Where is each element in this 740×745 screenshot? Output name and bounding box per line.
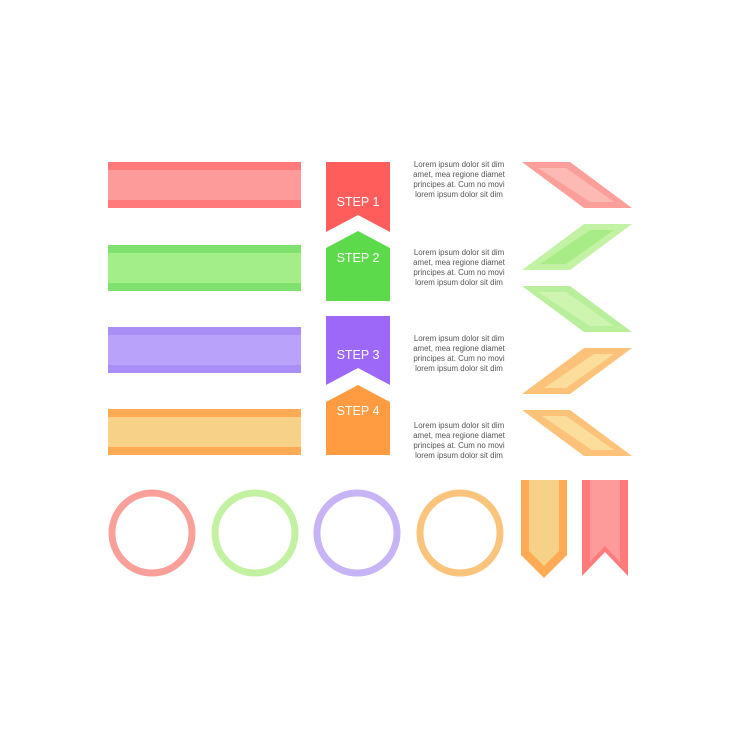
bookmark: orange [521,480,567,578]
text: step 4: Lorem ipsum dolor sit dim [414,421,505,430]
text: step 3 [413,334,506,373]
bar: orange [108,409,301,455]
parallelogram: orange 2 [522,410,632,456]
step 2 banner: STEP 2 [337,251,379,265]
text: step 4: amet, mea regione diamet [413,431,506,440]
text: step 1: lorem ipsum dolor sit dim [415,190,503,199]
step 3 banner [326,316,390,385]
text: step 2: amet, mea regione diamet [413,258,506,267]
bookmark: red [582,480,628,576]
bar: green [108,245,301,291]
step 4 banner [326,385,390,455]
circle: red [112,493,192,573]
step 3 banner: STEP 3 [337,348,379,362]
circle: purple [317,493,397,573]
text: step 2: Lorem ipsum dolor sit dim [414,248,505,257]
text: step 4: lorem ipsum dolor sit dim [415,451,503,460]
text blocks [413,160,506,460]
step 1 banner [326,162,390,232]
parallelogram: red [522,162,632,208]
parallelogram: green 1 [522,224,632,270]
circle: green [215,493,295,573]
bar: purple [108,327,301,373]
text: step 4 [413,421,506,460]
parallelogram: green 2 [522,286,632,332]
step 4 banner: STEP 4 [337,404,379,418]
text: step 2 [413,248,506,287]
parallelogram: orange 1 [522,348,632,394]
text: step 1: amet, mea regione diamet [413,170,506,179]
text: step 1 [413,160,506,199]
text: step 1: principes at. Cum no movi [413,180,505,189]
text: step 3: Lorem ipsum dolor sit dim [414,334,505,343]
circles [112,493,500,573]
step 2 banner [326,231,390,301]
circle: orange [420,493,500,573]
text: step 3: principes at. Cum no movi [413,354,505,363]
text: step 3: amet, mea regione diamet [413,344,506,353]
text: step 2: lorem ipsum dolor sit dim [415,278,503,287]
step 1 banner: STEP 1 [337,195,379,209]
text: step 1: Lorem ipsum dolor sit dim [414,160,505,169]
bar: red [108,162,301,208]
text: step 3: lorem ipsum dolor sit dim [415,364,503,373]
text: step 4: principes at. Cum no movi [413,441,505,450]
text: step 2: principes at. Cum no movi [413,268,505,277]
